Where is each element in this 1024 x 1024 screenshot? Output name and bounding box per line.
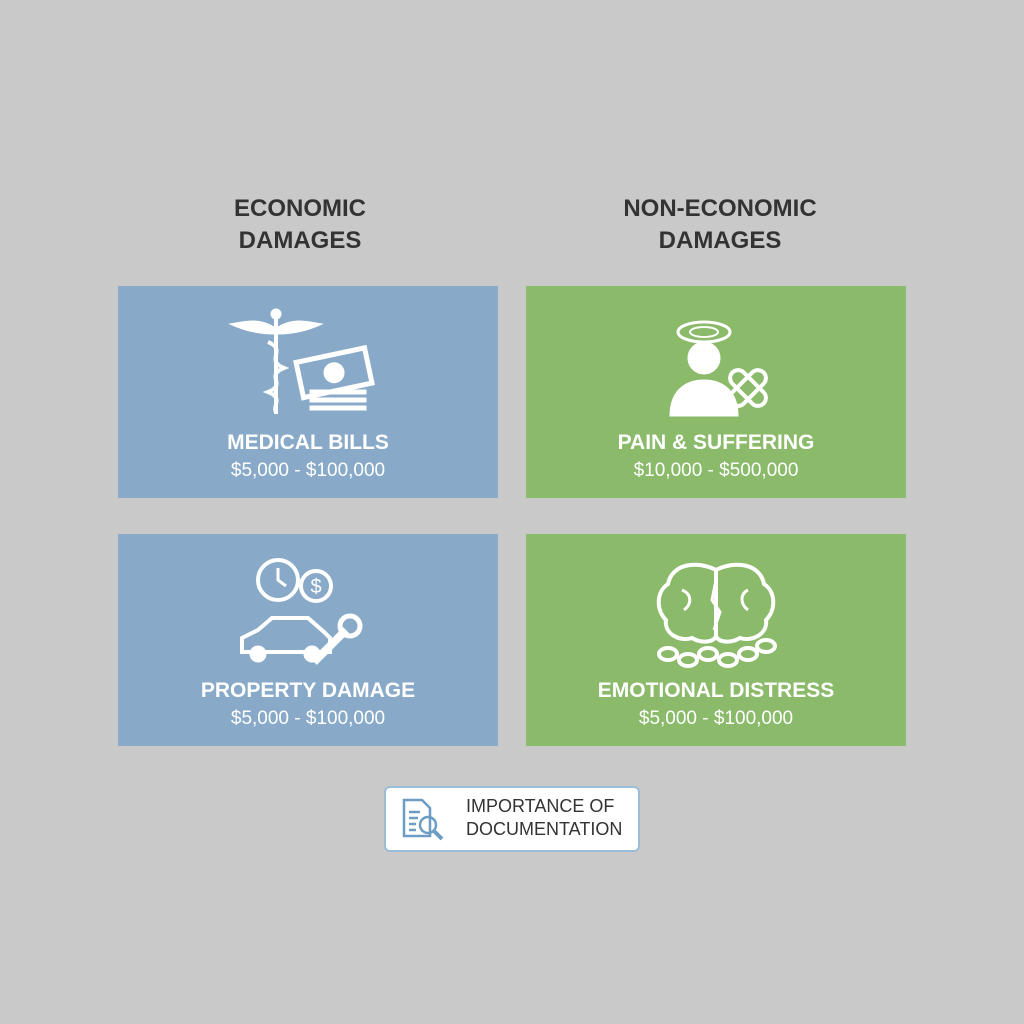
value range: $5,000 - $100,000 (231, 460, 385, 481)
label: DOCUMENTATION (466, 819, 622, 839)
heading: non-economic damages: NON-ECONOMIC (623, 195, 817, 222)
label: MEDICAL BILLS (227, 431, 389, 454)
heading: non-economic damages: DAMAGES (659, 227, 781, 254)
panel: medical bills (118, 286, 498, 498)
value range: $10,000 - $500,000 (634, 460, 798, 481)
callout: importance of documentation (384, 786, 640, 852)
label: EMOTIONAL DISTRESS (598, 679, 834, 702)
heading: economic damages (234, 195, 366, 254)
label (466, 796, 622, 839)
icon: document with magnifier (402, 798, 444, 840)
icon: person with bandage (670, 320, 768, 416)
panel: property damage (118, 534, 498, 746)
heading: non-economic damages (623, 195, 817, 254)
icon: car, clock, wrench: $ (310, 576, 322, 598)
label: IMPORTANCE OF (466, 796, 614, 816)
label: PROPERTY DAMAGE (201, 679, 415, 702)
panel: pain & suffering (526, 286, 906, 498)
heading: economic damages: ECONOMIC (234, 195, 366, 222)
panel: emotional distress (526, 534, 906, 746)
icon: brain with chains (656, 562, 777, 668)
value range: $5,000 - $100,000 (231, 708, 385, 729)
label: PAIN & SUFFERING (618, 431, 814, 454)
icon: caduceus and money (228, 308, 375, 414)
icon: car, clock, wrench (240, 558, 362, 665)
heading: economic damages: DAMAGES (239, 227, 361, 254)
value range: $5,000 - $100,000 (639, 708, 793, 729)
